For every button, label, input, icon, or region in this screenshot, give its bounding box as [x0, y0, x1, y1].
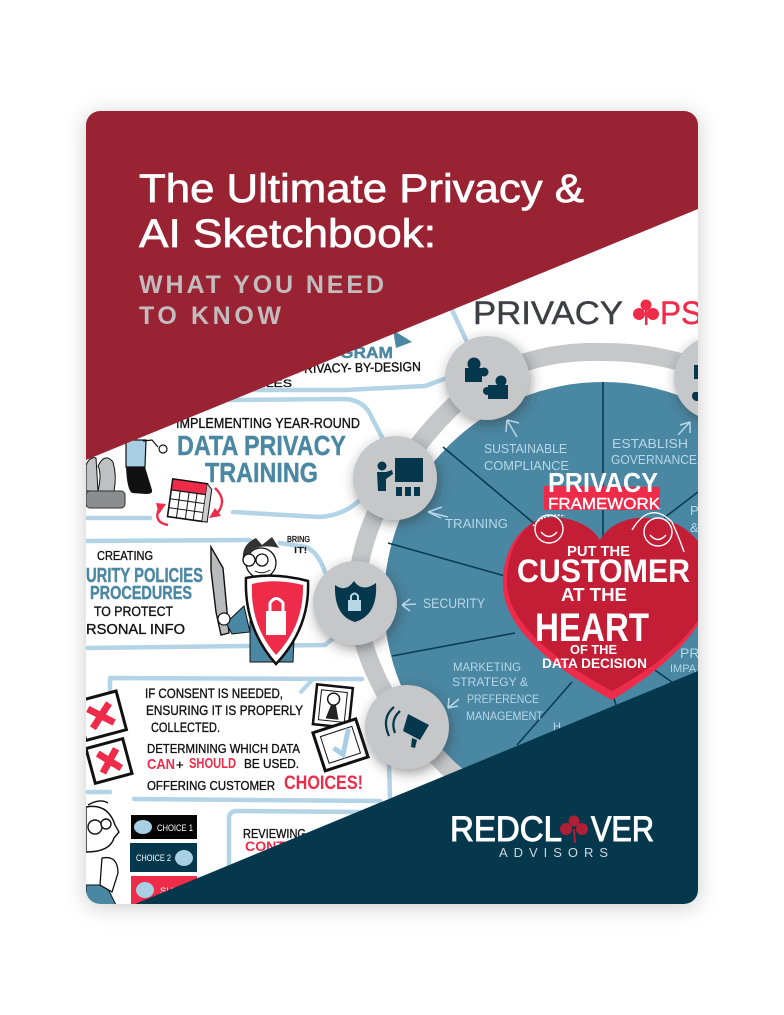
text: privacy by design program: PRIVACY- BY-DESIGN [296, 359, 421, 376]
wheel segment labels: MANAGEMENT [466, 709, 544, 723]
top red banner [86, 111, 698, 460]
heart: customer at the heart: AT THE [561, 585, 627, 605]
wheel segment labels: P [690, 503, 699, 518]
outer gray ring [351, 342, 682, 698]
text: consent and customer choices: BE USED. [244, 756, 299, 771]
illustration: thinking person [86, 801, 119, 905]
text: security policies: CREATING [97, 548, 153, 563]
text: security policies: RSONAL INFO [86, 622, 185, 638]
wheel segment labels: PR [680, 645, 699, 661]
wordmark: privacy ps: PS [660, 295, 702, 331]
wheel segment labels: SUSTAINABLE [484, 441, 567, 456]
text: consent and customer choices: ENSURING IT IS PROPERLY [146, 702, 304, 718]
text: consent and customer choices: CHOICES! [284, 773, 363, 794]
text: reviewing content: CONT [245, 838, 285, 854]
text: privacy by design program: ILES [262, 378, 292, 390]
icon: smiling faces [533, 513, 684, 552]
text: bring it: BRING [287, 535, 310, 544]
illustration: trainer and audience [86, 440, 167, 508]
heading: privacy framework: FRAMEWORK [548, 496, 660, 513]
icon: shield with lock [335, 581, 376, 622]
sketchnote background [86, 111, 698, 904]
text: data privacy training: DATA PRIVACY [177, 430, 346, 461]
icon: clover [560, 816, 588, 843]
subtitle: TO KNOW [139, 302, 281, 330]
heart: customer at the heart: CUSTOMER [517, 553, 690, 589]
text: data privacy training [177, 418, 360, 482]
icons: red x checkboxes [86, 689, 134, 786]
text: security policies: URITY POLICIES [86, 565, 203, 587]
heading: privacy framework: PRIVACY [548, 467, 658, 498]
text: security policies [86, 548, 203, 638]
card shadow [86, 111, 698, 904]
heart: customer at the heart: HEART [535, 606, 649, 650]
wheel disc [386, 382, 698, 769]
text: reviewing content: REVIEWING [243, 826, 306, 841]
text: consent and customer choices: SHOULD [189, 755, 236, 772]
choice buttons [130, 815, 197, 904]
text: consent and customer choices: CAN [147, 756, 175, 773]
icons: portrait and check boxes [300, 679, 368, 771]
text: security policies: TO PROTECT [94, 604, 173, 619]
logo: red clover advisors [450, 810, 654, 860]
node: training [353, 436, 437, 520]
text: privacy by design program: GRAM [340, 345, 393, 362]
node: marketing [365, 685, 449, 769]
wheel segment labels: GOVERNANCE [611, 452, 697, 467]
text: consent and customer choices: DETERMINING WHICH DATA [147, 741, 300, 756]
wheel segment labels: SECURITY [423, 595, 486, 611]
wheel segment labels: COMPLIANCE [484, 458, 569, 473]
logo: red clover advisors: VER [591, 810, 654, 849]
subtitle: WHAT YOU NEED [139, 271, 384, 299]
text: privacy by design program [262, 330, 421, 390]
choice buttons: CHOICE 2 [136, 853, 171, 864]
text: consent and customer choices: + [176, 757, 184, 772]
card [86, 111, 698, 904]
node: security [313, 561, 397, 645]
icon: governance glyph [692, 365, 698, 401]
wordmark: privacy ps [476, 300, 698, 325]
icon: presenter at board [377, 458, 423, 496]
connecting sketch routes [86, 310, 467, 870]
text: data privacy training: IMPLEMENTING YEAR-ROUND [176, 415, 360, 432]
wordmark: privacy ps: PRIVACY [473, 295, 623, 331]
text: consent and customer choices: OFFERING CUSTOMER [147, 778, 275, 793]
bottom navy banner [135, 671, 698, 904]
heading: privacy framework [544, 472, 660, 510]
text: consent and customer choices: COLLECTED. [151, 719, 220, 735]
icon: puzzle pieces [465, 358, 508, 399]
choice buttons: CHOICE 1 [157, 823, 193, 834]
text: data privacy training: TRAINING [205, 457, 318, 488]
text: consent and customer choices: IF CONSENT IS NEEDED, [145, 685, 283, 701]
text: bring it: IT! [294, 546, 307, 555]
subtitle [139, 275, 383, 324]
node: sustainable compliance [445, 336, 529, 420]
node: establish governance [668, 336, 698, 426]
wheel segment labels: PREFERENCE [467, 692, 539, 706]
heart: customer at the heart: OF THE [570, 643, 617, 657]
wheel segment labels: ESTABLISH [612, 436, 688, 451]
logo: red clover advisors: ADVISORS [499, 845, 608, 860]
wheel segment labels: H [553, 721, 561, 733]
wheel spokes [388, 382, 698, 745]
title: The Ultimate Privacy & [139, 167, 584, 211]
wheel segment labels [423, 436, 699, 733]
wheel arrows [402, 420, 690, 708]
wheel segment labels: TRAINING [445, 516, 508, 531]
choice buttons: SURE [160, 886, 186, 897]
title [138, 172, 584, 248]
icon: megaphone [386, 707, 429, 748]
icon: red clover [633, 300, 659, 325]
text: bring it [287, 535, 310, 555]
wheel segment labels: MARKETING [453, 660, 521, 674]
wheel segment labels: & [690, 520, 699, 535]
wheel segment labels: STRATEGY & [452, 675, 528, 689]
text: security policies: PROCEDURES [90, 583, 192, 603]
illustration: knight with shield and sword [211, 537, 308, 664]
heart: customer at the heart [503, 513, 712, 700]
title: AI Sketchbook: [139, 212, 436, 256]
heart: customer at the heart: PUT THE [567, 543, 630, 560]
logo: red clover advisors: REDCL [450, 810, 562, 849]
text: consent and customer choices [145, 685, 363, 794]
icon: calendar with refresh arrows [156, 479, 222, 525]
wheel segment labels: IMPA [670, 663, 697, 675]
privacy framework wheel [307, 332, 698, 782]
text: reviewing content [244, 828, 306, 851]
heart: customer at the heart: DATA DECISION [542, 655, 647, 671]
